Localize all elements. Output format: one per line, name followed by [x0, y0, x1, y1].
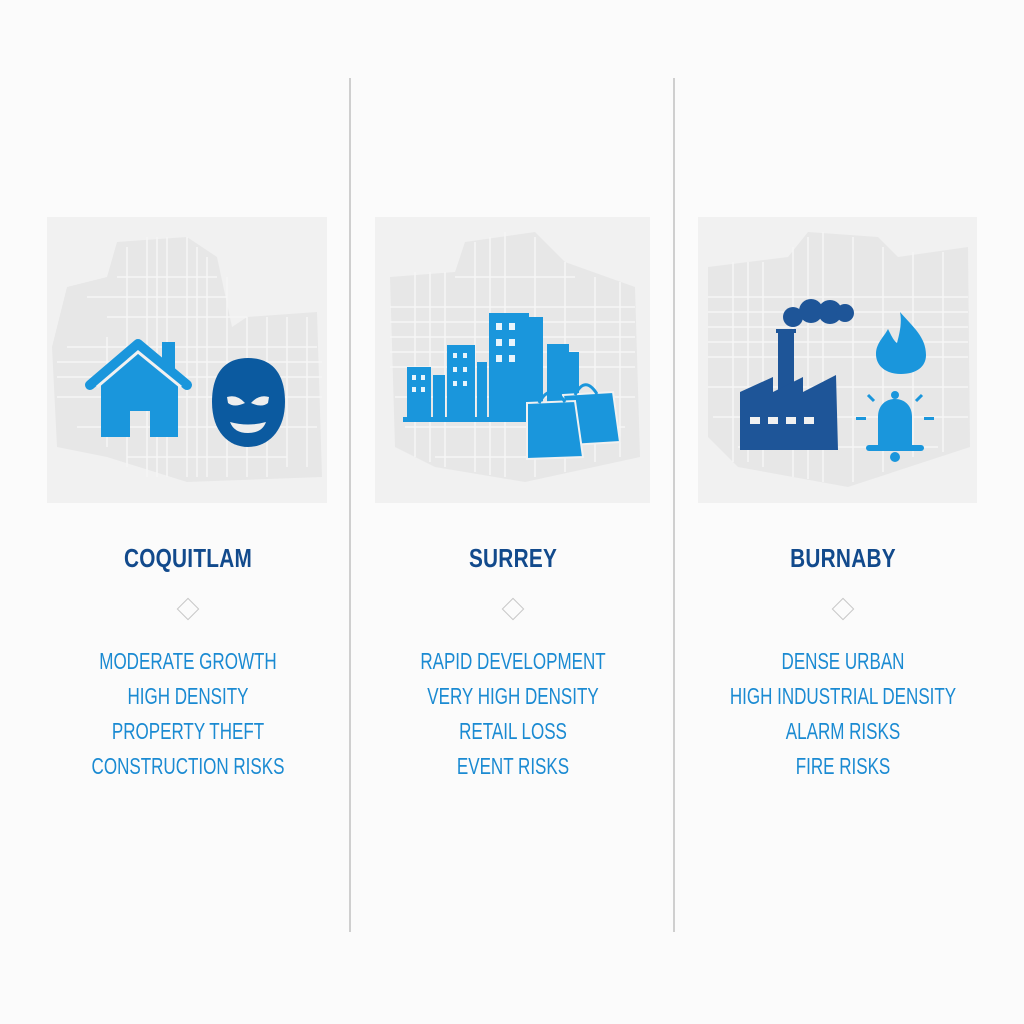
- icon: flame: [876, 312, 926, 374]
- column text: burnaby: ALARM RISKS: [786, 718, 900, 744]
- column text: coquitlam: MODERATE GROWTH: [99, 648, 277, 674]
- icon: mask: [212, 358, 285, 447]
- icon: city buildings: [403, 313, 603, 422]
- icon: shopping bags: [527, 385, 620, 459]
- column text: surrey: RETAIL LOSS: [459, 718, 567, 744]
- icon: bell: [856, 391, 934, 462]
- column text: coquitlam: COQUITLAM: [124, 543, 252, 573]
- column text: coquitlam: [92, 543, 284, 779]
- column text: coquitlam: PROPERTY THEFT: [112, 718, 264, 744]
- panel: coquitlam map: [47, 217, 327, 503]
- column text: burnaby: BURNABY: [790, 543, 896, 573]
- column text: burnaby: DENSE URBAN: [782, 648, 904, 674]
- column text: burnaby: [730, 543, 956, 779]
- column text: burnaby: HIGH INDUSTRIAL DENSITY: [730, 683, 956, 709]
- panel: surrey map: [375, 217, 650, 503]
- column text: surrey: SURREY: [469, 543, 557, 573]
- column text: burnaby: FIRE RISKS: [796, 753, 890, 779]
- column text: surrey: EVENT RISKS: [457, 753, 569, 779]
- panel: burnaby map: [698, 217, 977, 503]
- icon: factory: [740, 299, 854, 450]
- icon: house: [90, 342, 187, 437]
- column text: surrey: VERY HIGH DENSITY: [427, 683, 599, 709]
- column text: coquitlam: CONSTRUCTION RISKS: [92, 753, 284, 779]
- column text: surrey: RAPID DEVELOPMENT: [420, 648, 606, 674]
- column text: coquitlam: HIGH DENSITY: [127, 683, 249, 709]
- column text: surrey: [420, 543, 606, 779]
